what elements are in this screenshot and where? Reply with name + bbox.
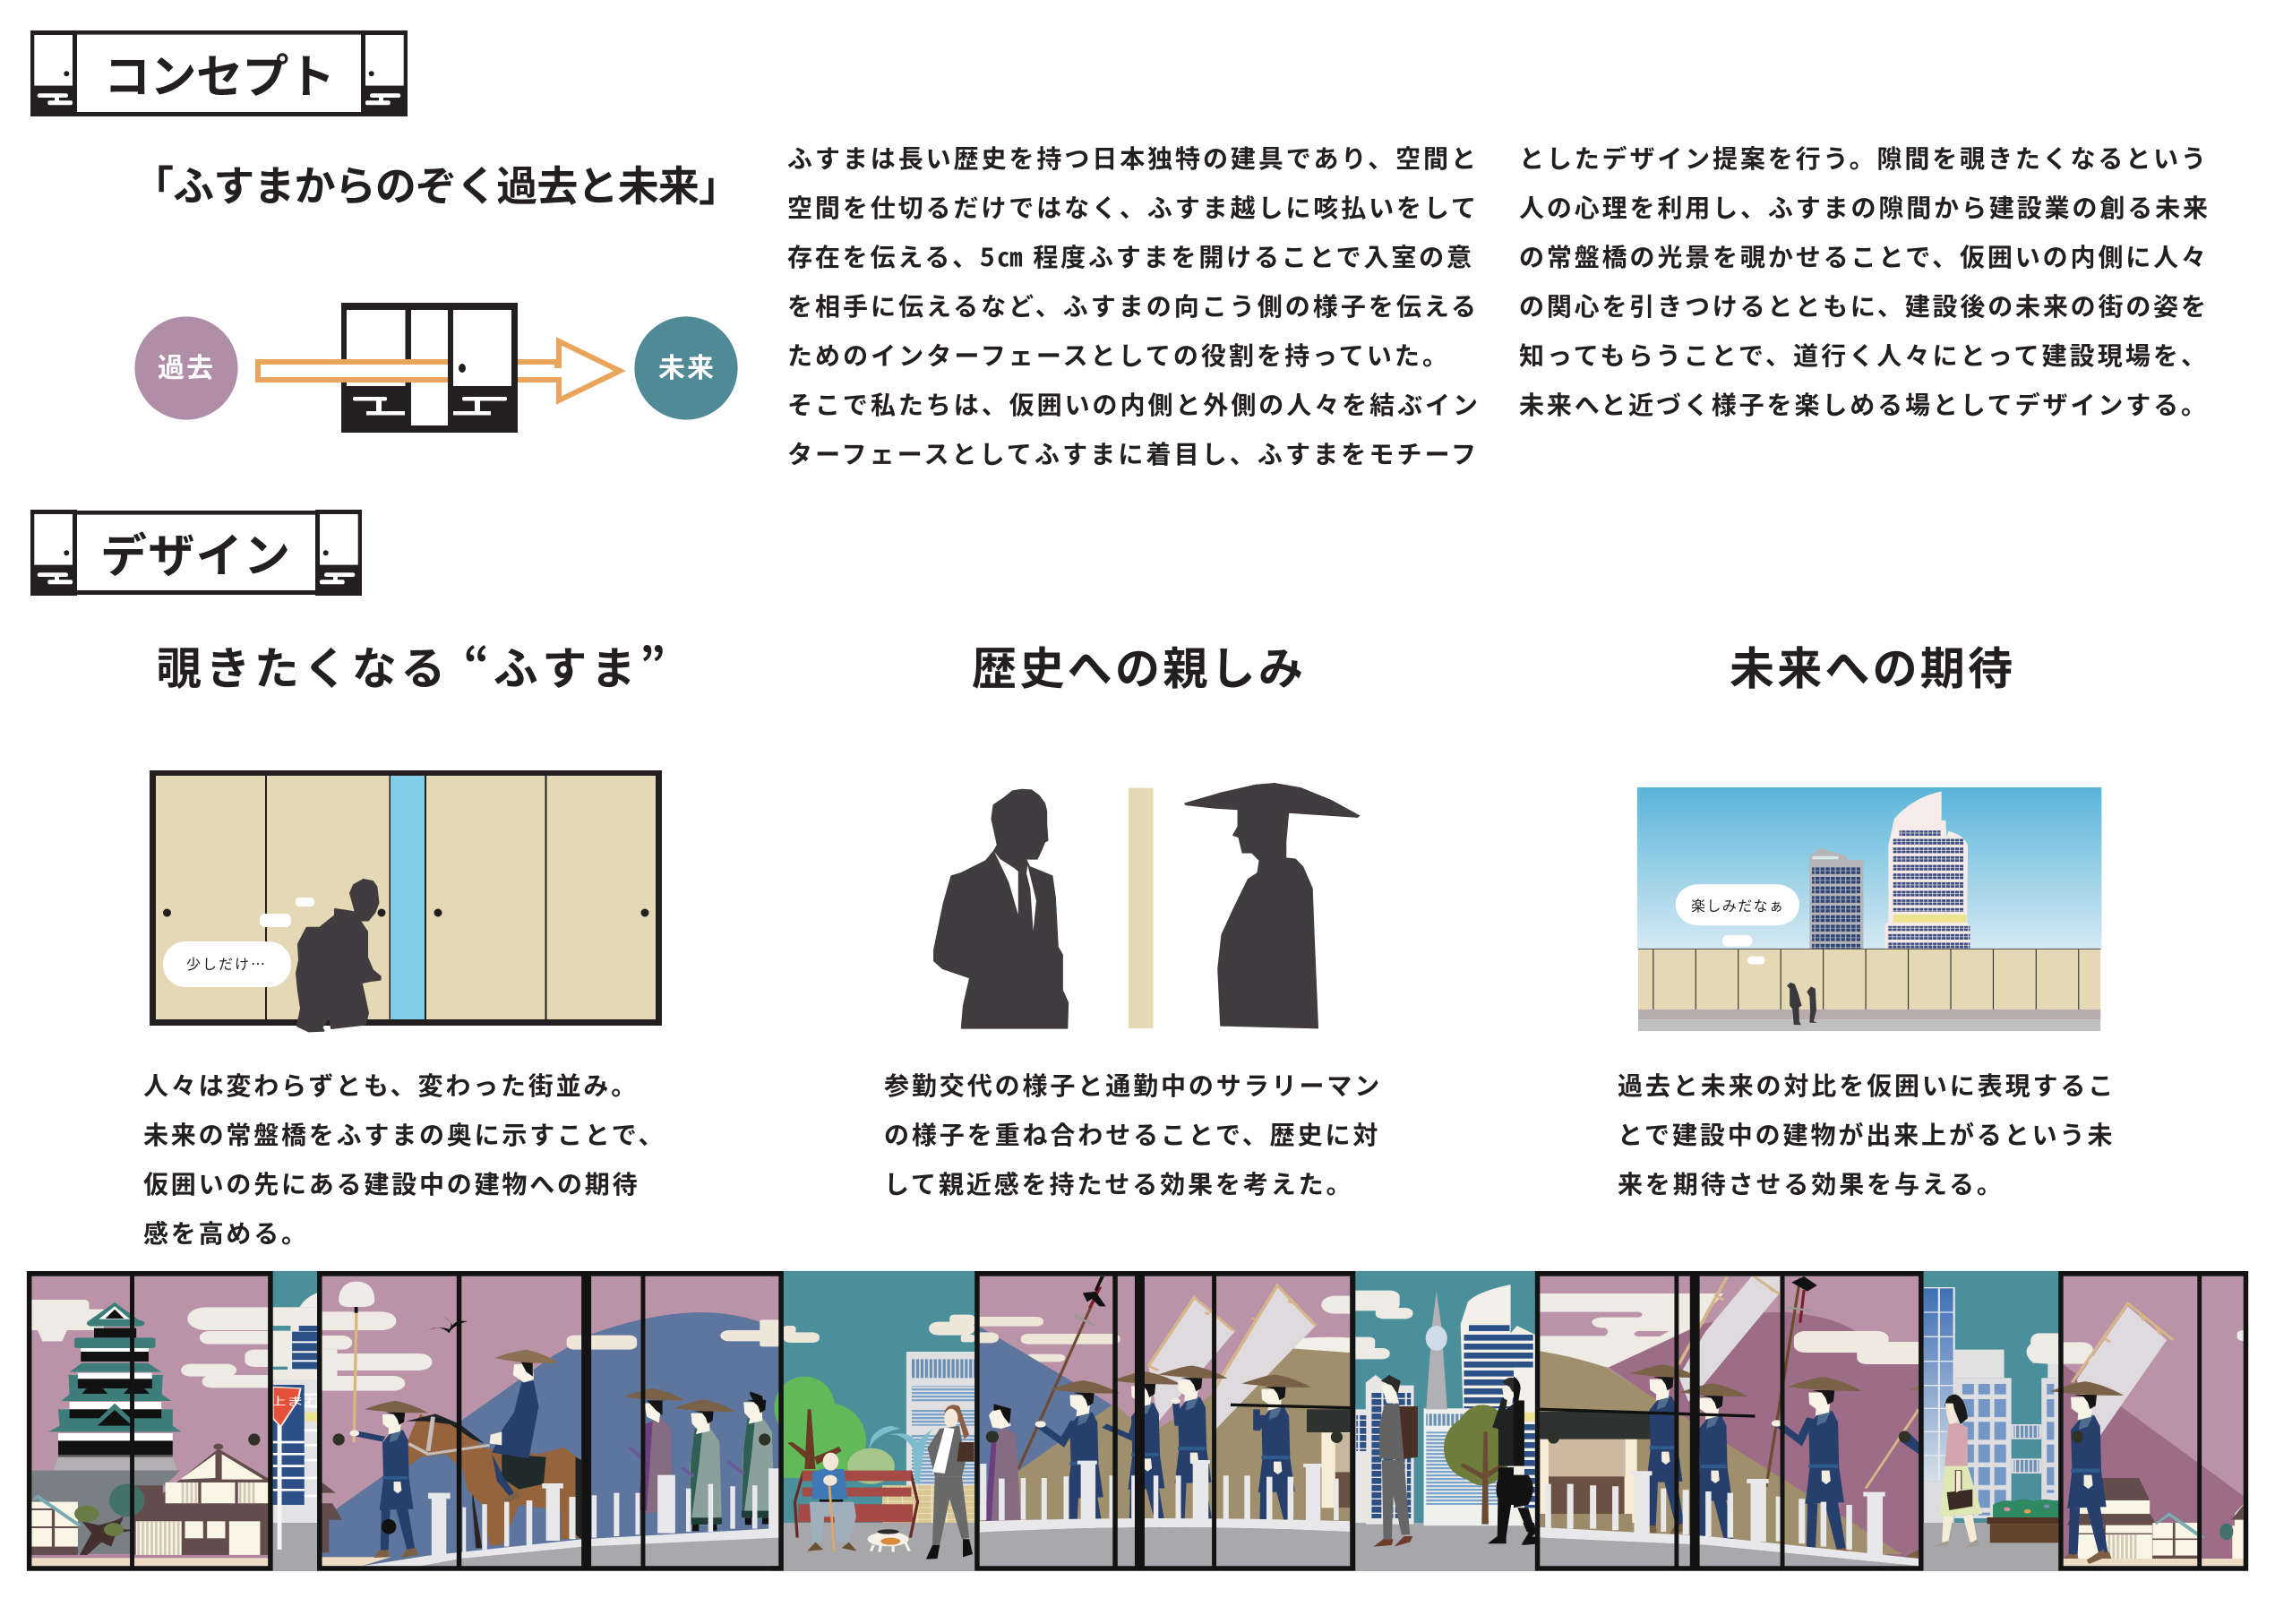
concept text column 2: の関心を引きつけるとともに、建設後の未来の街の姿を [1519,288,2206,323]
pine tree [74,1484,145,1556]
purple samurai [985,1404,1021,1521]
concept text column 1: 存在を伝える、5㎝ 程度ふすまを開けることで入室の意 [787,238,1472,274]
beige hill [980,1348,1350,1521]
concept text column 1: ふすまは長い歴史を持つ日本独特の建具であり、空間と [787,140,1476,176]
road panel D [1540,1538,1919,1566]
mountain [322,1312,779,1566]
silhouette: salaryman [934,789,1068,1028]
bubble label: 楽しみだなぁ [1691,894,1784,915]
description 1: 感を高める。 [143,1215,309,1250]
silhouette: traveller in straw hat [1185,783,1360,1028]
panel D background [1540,1276,1919,1566]
clouds gap [784,1315,974,1343]
retainer E [2050,1381,2124,1563]
fountain [869,1426,932,1484]
silhouette: kneeling samurai [296,880,381,1031]
description 1 [143,1067,665,1250]
description 1: 未来の常盤橋をふすまの奥に示すことで、 [143,1116,665,1152]
concept text column 1: そこで私たちは、仮囲いの内側と外側の人々を結ぶイン [787,386,1478,422]
tiny silhouettes [1787,983,1817,1025]
circle: future: 未来 [658,346,716,385]
rail panel C [980,1460,1350,1533]
woman with bag [926,1405,974,1560]
clouds panel A [31,1300,269,1388]
retainers [1540,1276,1919,1559]
panel: fusuma with peeking silhouette [150,770,662,1031]
heading tag: デザイン: デザイン [100,519,290,586]
gray tower [1809,848,1863,949]
clouds panel B [293,1311,799,1391]
knobs [248,1433,770,1534]
beige hill [1540,1351,1902,1554]
purple mountain [1609,1312,1919,1566]
banner [1678,1276,1780,1402]
businessman with backpack [1374,1375,1418,1547]
curved white tower [1885,791,1970,949]
concept text column 2: としたデザイン提案を行う。隙間を覗きたくなるという [1519,140,2206,176]
concept text column 2: 人の心理を利用し、ふすまの隙間から建設業の創る未来 [1519,189,2208,225]
circle: future [634,316,738,420]
description 2: して親近感を持たせる効果を考えた。 [884,1165,1353,1201]
banner E [2072,1303,2173,1448]
shrine and palanquin [1540,1412,1659,1532]
headline: 「ふすまからのぞく過去と未来」 [133,154,740,213]
description 3: 過去と未来の対比を仮囲いに表現するこ [1618,1067,2116,1103]
heading tag: コンセプト [30,30,408,116]
blue cloud in front [980,1332,1000,1344]
cloud in front of mountain [1794,1331,1889,1353]
arrow [258,341,620,400]
office building [882,1352,974,1523]
road panel B [322,1538,779,1566]
speech bubble: 少しだけ… [186,952,267,974]
concept text column 2: 未来へと近づく様子を楽しめる場としてデザインする。 [1519,386,2206,422]
fusuma icon right door [448,303,518,433]
spear [1018,1276,1106,1469]
concept text column 1: を相手に伝えるなど、ふすまの向こう側の様子を伝える [787,288,1476,323]
panel: city behind hoarding [1637,787,2101,1031]
lead retainer [349,1401,429,1558]
shoji bar [1129,788,1153,1028]
concept text column 1: 空間を仕切るだけではなく、ふすま越しに咳払いをして [787,189,1476,225]
concept diagram: past to future through fusuma [134,303,738,433]
panel C background [980,1276,1350,1566]
lantern pole [339,1282,374,1442]
description 2: 参勤交代の様子と通勤中のサラリーマン [884,1067,1382,1103]
fusuma icon left and gap [341,303,518,433]
frieze right: procession, woman and houses [1514,1271,2256,1571]
frames [27,1271,784,1571]
panel A background [31,1276,268,1566]
blue mountain wedge [980,1327,1114,1523]
purple mountain E [2064,1364,2244,1559]
retainers [1035,1365,1311,1550]
concept text column 2: の常盤橋の光景を覗かせることで、仮囲いの内側に人々 [1519,238,2206,274]
birds [428,1318,468,1333]
frieze left: castle and procession [18,1271,799,1571]
clouds panel D [1540,1293,1888,1368]
houses E [2067,1478,2244,1559]
section heading 2: 歴史への親しみ [972,633,1303,698]
banner foreground [1154,1326,1316,1431]
samurai group [623,1388,775,1531]
frieze middle: bench, procession and businessmen [770,1271,1541,1571]
circle: past [134,316,238,420]
concept text column 1: ためのインターフェースとしての役割を持っていた。 [787,337,1447,373]
cat [868,1529,909,1552]
gap at left: building and businessman [1514,1335,1536,1545]
ground panel A [31,1555,268,1566]
tree right [1444,1405,1512,1525]
trees [774,1377,895,1484]
description 1: 仮囲いの先にある建設中の建物への期待 [143,1165,640,1201]
description 2 [884,1067,1382,1201]
speech bubble [163,898,314,987]
panel B background [322,1276,779,1566]
road panel C [980,1527,1350,1566]
section heading 1: 覗きたくなる “ふすま” [157,633,665,698]
old man [807,1453,857,1551]
boots [1904,1550,1919,1558]
gap: city street with stop sign [269,1293,322,1550]
woman with handbag [1932,1395,1982,1548]
apartment buildings [1954,1350,2058,1518]
clouds panel C [962,1296,1366,1362]
cloud gap [2027,1333,2058,1364]
heading tag: コンセプト: コンセプト [104,39,335,107]
rail panel D [1540,1471,1919,1566]
palanquin and shrine [1231,1405,1350,1508]
rail panel B [362,1468,779,1566]
frames [770,1271,1355,1571]
description 3: とで建設中の建物が出来上がるという未 [1618,1116,2115,1152]
bench [794,1471,918,1538]
panel E background [2064,1276,2244,1566]
city gap right [1355,1285,1535,1525]
concept text column 1: ターフェースとしてふすまに着目し、ふすまをモチーフ [787,435,1476,471]
description 2: の様子を重ね合わせることで、歴史に対 [884,1116,1380,1152]
house behind panel B [322,1482,342,1552]
description 1: 人々は変わらずとも、変わった街並み。 [143,1067,639,1103]
section heading 3: 未来への期待 [1730,633,2013,698]
horse [406,1413,581,1548]
cloud E [2064,1330,2244,1364]
glass building [1924,1288,1954,1523]
planter [1987,1499,2058,1542]
banners [1148,1285,1316,1431]
businessman on phone [1488,1378,1541,1545]
castle [48,1302,181,1471]
concept text column 2: 知ってもらうことで、道行く人々にとって建設現場を、 [1519,337,2206,373]
gap: city street with stop sign: 止まれ [269,1392,322,1408]
town wall and houses [31,1444,269,1555]
clouds right [1355,1290,1413,1360]
lower cloud right [1857,1348,1919,1364]
description 3 [1618,1067,2116,1201]
hoarding fence [1638,949,2100,1031]
circle: past: 過去 [158,346,215,385]
frames [1535,1271,2248,1571]
frieze: hoarding base [27,1271,2248,1571]
rider [490,1350,558,1503]
ground E [2064,1559,2244,1566]
concept text column 1 [787,140,1478,471]
speech bubble [1676,884,1799,965]
panel: silhouettes across the gap [934,783,1360,1028]
description 3: 来を期待させる効果を与える。 [1618,1165,2005,1201]
heading tag: デザイン [30,510,362,596]
concept text column 2 [1519,140,2208,422]
